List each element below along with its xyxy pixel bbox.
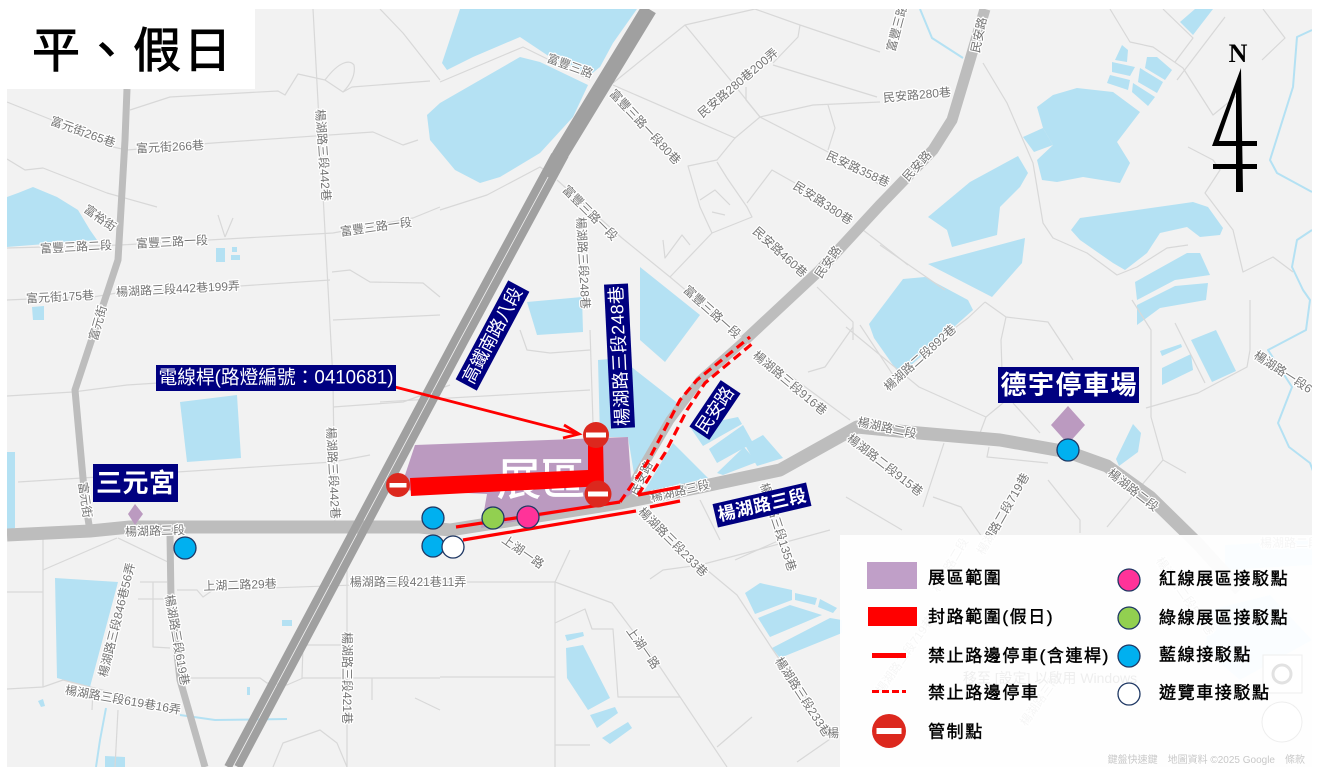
legend: green line stop bbox=[1118, 607, 1140, 629]
map controls bbox=[1262, 655, 1302, 742]
road name labels: 楊湖路三段248巷 bbox=[574, 217, 593, 309]
legend: dashed line text: 禁止路邊停車 bbox=[928, 684, 1040, 702]
road name labels: 民安路 bbox=[811, 243, 844, 281]
Sanyuan temple marker bbox=[128, 504, 143, 525]
road name labels: 楊湖路三段916巷 bbox=[750, 347, 830, 418]
road name labels: 楊湖路三段619巷 bbox=[162, 593, 193, 687]
road name labels: 富元街266巷 bbox=[136, 137, 204, 156]
road name labels: 楊湖路二段 bbox=[1260, 535, 1319, 550]
road name labels: 楊湖路二段719巷 bbox=[872, 613, 937, 697]
road name labels: 楊湖路二段 bbox=[856, 414, 918, 441]
road name labels: 楊湖路三段846巷56弄 bbox=[95, 561, 138, 679]
no roadside parking dashed lines bbox=[620, 337, 753, 502]
legend: road closure swatch bbox=[868, 607, 917, 626]
label: HSR South Road section 8: 高鐵南路八段 bbox=[459, 284, 526, 387]
no roadside parking lines including connector bbox=[456, 487, 680, 540]
exhibition area label: 展區 bbox=[497, 456, 585, 504]
road name labels: 楊湖路三段421巷 bbox=[340, 632, 355, 724]
high-speed rail line bbox=[228, 9, 649, 767]
legend: exhibition area text: 展區範圍 bbox=[928, 568, 1002, 588]
road name labels: 富元街 bbox=[85, 303, 110, 342]
road name labels: 楊湖路三段442巷 bbox=[313, 109, 334, 201]
legend: control point text: 管制點 bbox=[928, 722, 984, 742]
road name labels: 富豐三路一段80巷 bbox=[607, 86, 684, 167]
label: Yanghu Road 248 lane: 楊湖路三段248巷 bbox=[606, 286, 633, 426]
legend: blue line stop text: 藍線接駁點 bbox=[1159, 646, 1252, 664]
control point: east bbox=[584, 480, 612, 508]
road name labels: 富豐三路二段 bbox=[40, 237, 112, 256]
road name labels: 民安路380巷 bbox=[791, 178, 856, 227]
road name labels: 富豐三路一段 bbox=[560, 182, 621, 243]
road name labels: 楊湖路三段233巷 bbox=[636, 504, 711, 579]
road name labels: 楊湖路三段135巷 bbox=[757, 481, 800, 573]
control point: north pole bbox=[583, 422, 609, 448]
road name labels: 楊湖路二段719巷 bbox=[973, 470, 1032, 557]
title panel: 平、假日 bbox=[32, 25, 234, 78]
road name labels: 富豐三路一段 bbox=[136, 232, 208, 251]
road closure bar (holidays) bbox=[410, 440, 604, 496]
control point: west bbox=[386, 473, 410, 497]
north arrow bbox=[1212, 39, 1257, 192]
activation watermark: 移至 [設定] 以啟用 Windows bbox=[963, 670, 1137, 686]
road name labels: 民安路 bbox=[967, 16, 990, 54]
road name labels: 楊湖路三段233巷 bbox=[772, 654, 835, 739]
road name labels: 富元街265巷 bbox=[49, 113, 118, 150]
road name labels: 富豐三路 bbox=[545, 50, 595, 81]
legend: tour bus stop bbox=[1118, 683, 1140, 705]
road name labels: 楊湖路三段 bbox=[649, 476, 711, 505]
legend: road closure text: 封路範圍(假日) bbox=[928, 608, 1054, 626]
label: utility pole: 電線桿(路燈編號：0410681) bbox=[158, 366, 394, 388]
callout arrow to utility pole bbox=[395, 387, 579, 438]
label: Minan Road: 民安路 bbox=[692, 383, 738, 437]
legend panel bbox=[840, 535, 1312, 767]
label: Yanghu Road section 3: 楊湖路三段 bbox=[716, 485, 809, 525]
road name labels: 楊湖路三段442巷 bbox=[324, 427, 343, 519]
legend: red line stop bbox=[1118, 569, 1140, 591]
blue stop at Sanyuan temple bbox=[174, 537, 196, 559]
legend: control point icon bbox=[872, 714, 906, 748]
map attribution: 鍵盤快速鍵 地圖資料 ©2025 Google 條款 bbox=[1108, 753, 1305, 766]
legend: exhibition area swatch bbox=[867, 562, 917, 589]
road name labels: 楊湖路三段619巷16弄 bbox=[64, 682, 182, 717]
road name labels: 民安路280巷 bbox=[882, 84, 951, 105]
blue stop at Deyu parking bbox=[1057, 439, 1079, 461]
legend: solid line text: 禁止路邊停車(含連桿) bbox=[928, 646, 1110, 666]
road name labels: 楊湖路二段915巷 bbox=[844, 430, 926, 499]
road name labels: 富元街175巷 bbox=[26, 287, 94, 306]
north arrow: N bbox=[1229, 39, 1248, 68]
road name labels: 民安路 bbox=[899, 147, 934, 184]
road name labels: 楊湖路二段 bbox=[1105, 465, 1162, 514]
road name labels: 富豐三路一段 bbox=[681, 282, 744, 341]
title panel bbox=[0, 0, 255, 89]
legend: dashed line swatch bbox=[872, 690, 906, 693]
road name labels: 楊湖路三段 bbox=[125, 522, 185, 539]
road name labels: 楊湖路二段 bbox=[928, 535, 971, 594]
label: Sanyuan temple: 三元宮 bbox=[96, 468, 175, 498]
legend: blue line stop bbox=[1118, 645, 1140, 667]
road name labels: 楊湖路一段6 bbox=[1251, 347, 1316, 396]
road name labels: 富裕街 bbox=[81, 201, 119, 234]
road name labels: 楊湖路二段892巷 bbox=[880, 321, 959, 394]
road name labels: 民安路358巷 bbox=[824, 147, 892, 190]
road name labels: 民安路 bbox=[625, 458, 656, 497]
road name labels: 上湖一路 bbox=[623, 624, 663, 672]
legend: red line stop text: 紅線展區接駁點 bbox=[1159, 570, 1289, 588]
road name labels: 富元街 bbox=[76, 481, 95, 519]
road name labels: 上湖一路 bbox=[499, 532, 547, 572]
road name labels: 民安路280巷200弄 bbox=[695, 45, 781, 121]
road name labels: 上湖二路29巷 bbox=[203, 576, 277, 593]
road name labels: 楊 bbox=[827, 725, 839, 740]
road name labels: 富豐三路 bbox=[883, 3, 910, 53]
legend: green line stop text: 綠線展區接駁點 bbox=[1159, 608, 1289, 628]
road name labels: 民安路460巷 bbox=[750, 223, 811, 280]
Deyu parking marker bbox=[1051, 406, 1085, 444]
label: Deyu parking: 德宇停車場 bbox=[1000, 370, 1136, 400]
legend: solid line swatch bbox=[872, 653, 906, 658]
legend: tour bus stop text: 遊覽車接駁點 bbox=[1159, 684, 1271, 702]
road name labels: 楊湖路二段525巷 bbox=[1153, 554, 1218, 638]
shuttle stops near the exhibition bbox=[422, 506, 539, 558]
road name labels: 楊湖路三段442巷199弄 bbox=[116, 278, 240, 299]
road name labels: 富豐三路一段 bbox=[339, 214, 413, 239]
road name labels: 楊湖路三段421巷11弄 bbox=[350, 574, 466, 589]
road name labels: 楊湖路三段 bbox=[1016, 671, 1063, 729]
exhibition area bbox=[400, 437, 632, 528]
